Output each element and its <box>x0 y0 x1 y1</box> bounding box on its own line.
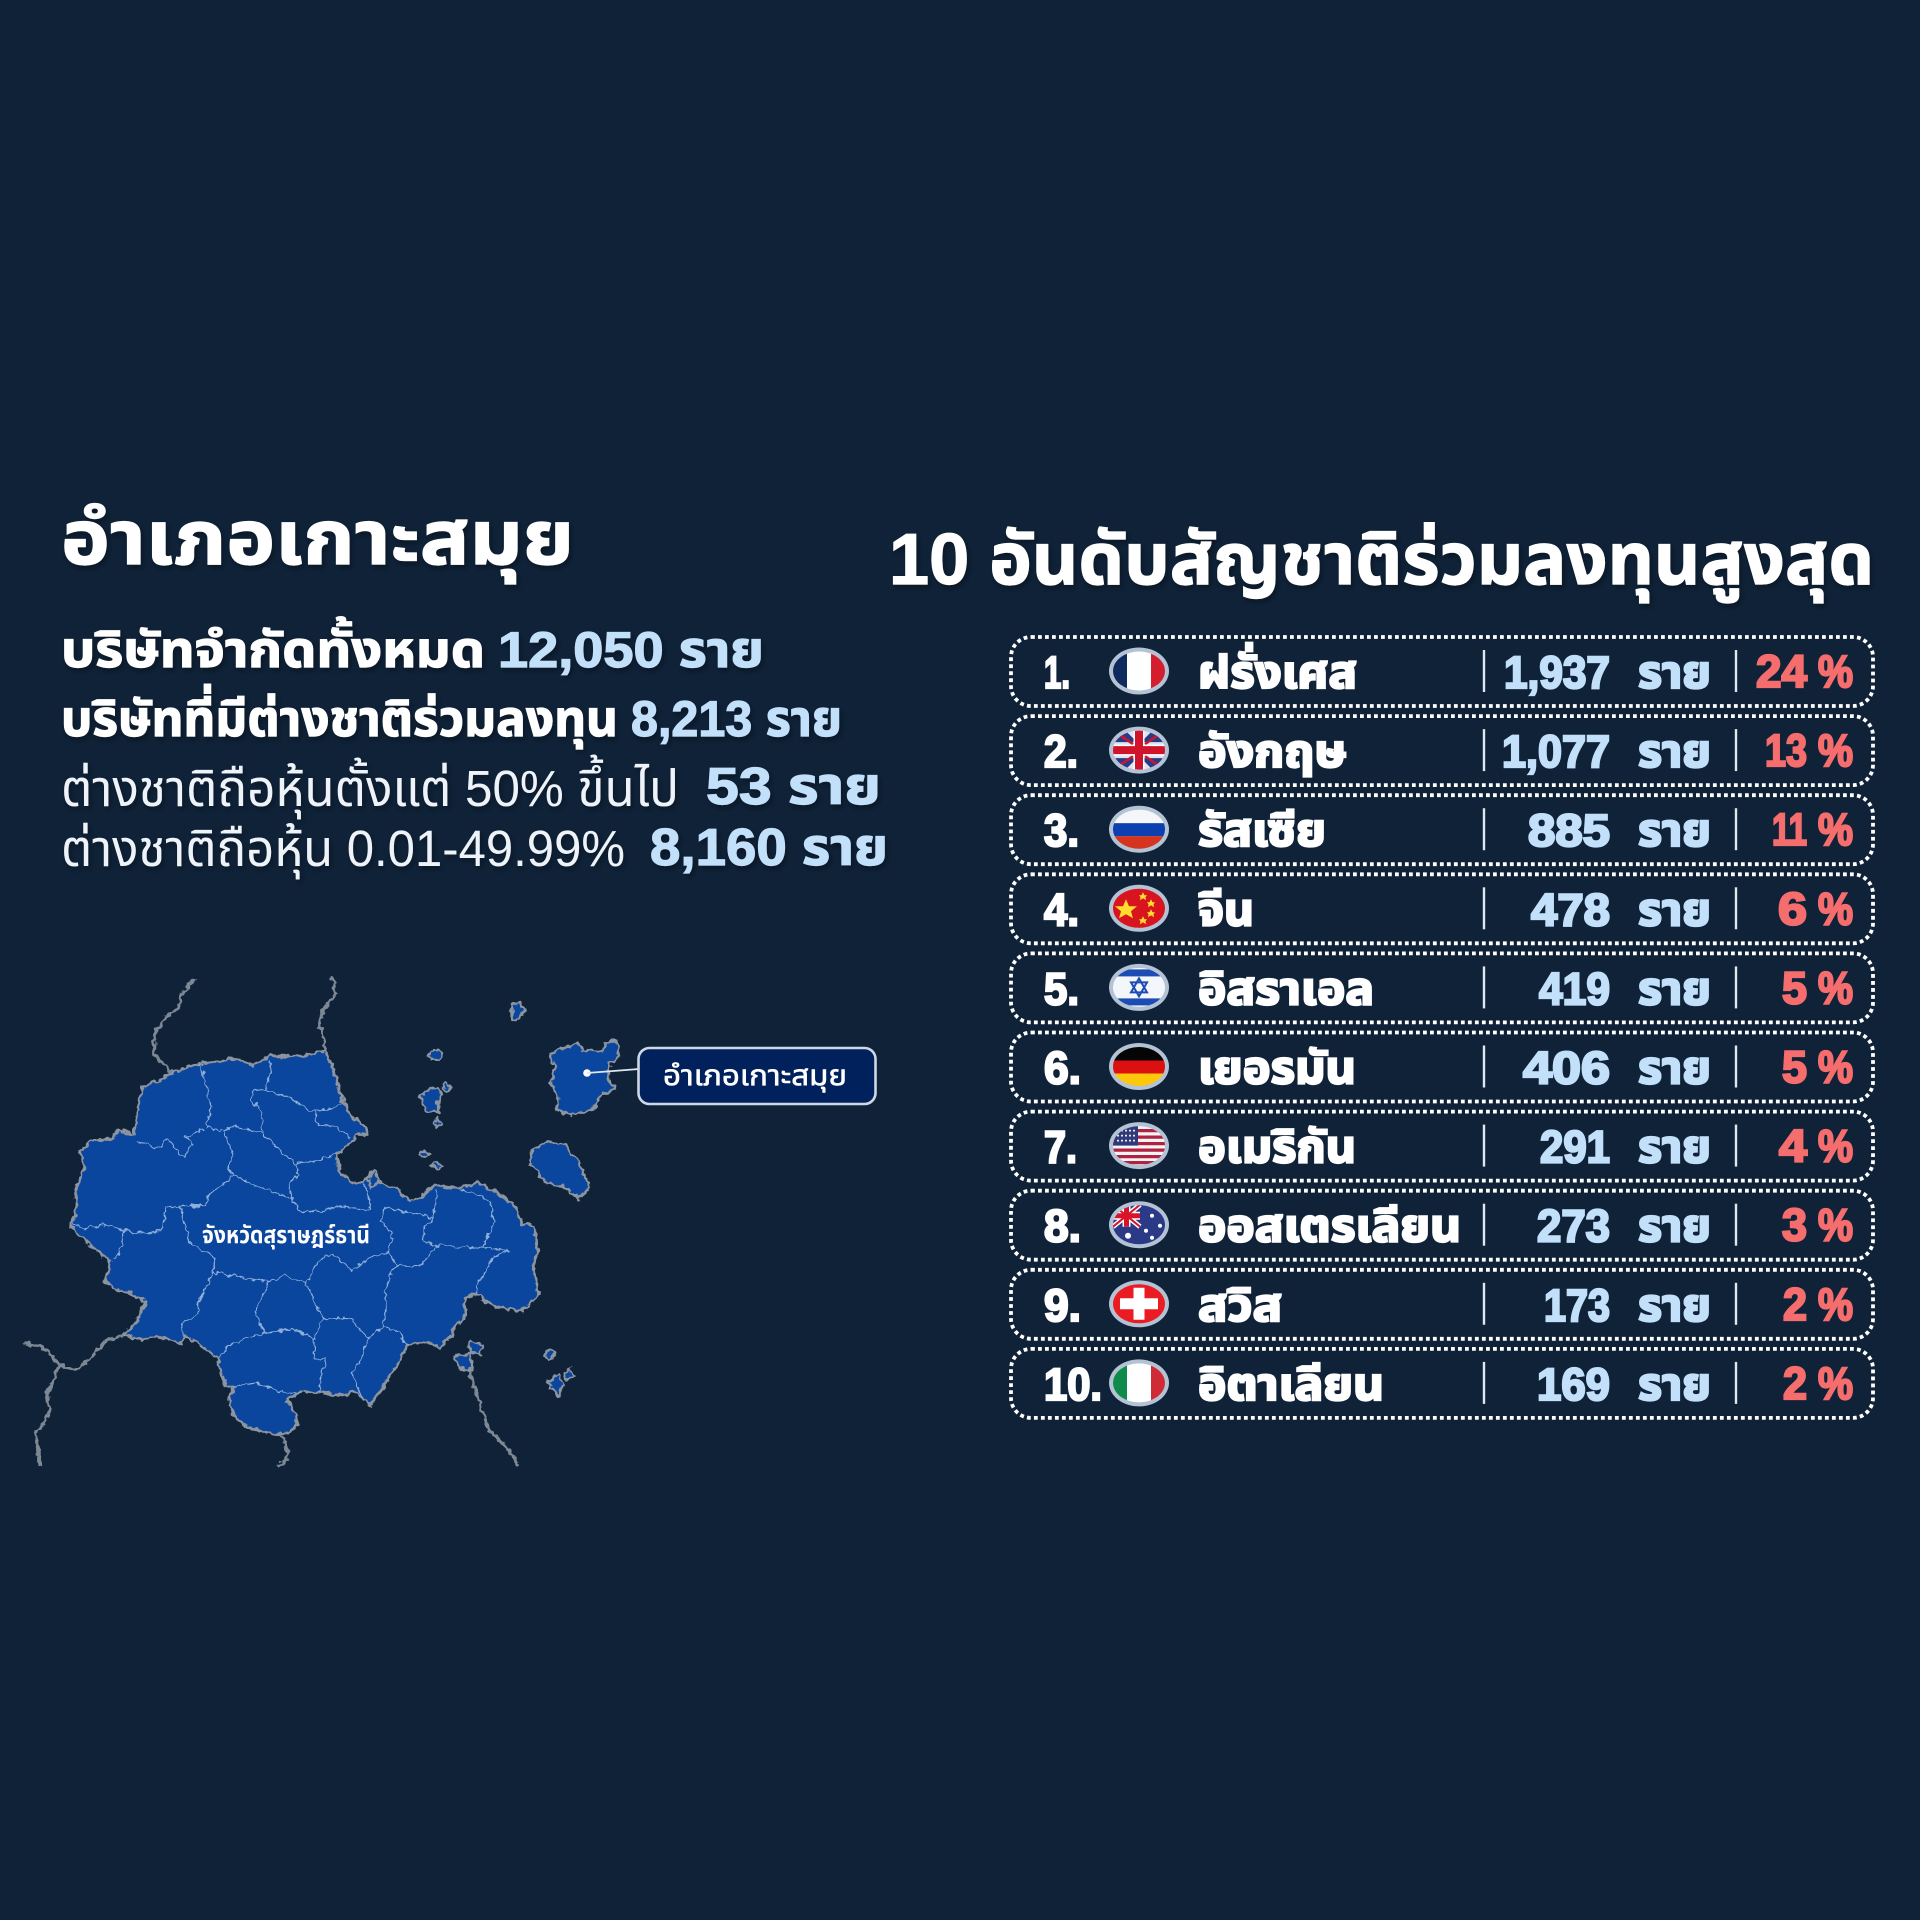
row 5: Israel: % <box>1818 962 1853 1013</box>
row 3: Russia: 11 <box>1772 804 1807 855</box>
row 3: Russia: % <box>1818 804 1853 855</box>
row 5: Israel: 5 <box>1782 962 1807 1013</box>
row 1: France: ฝรั่งเศส <box>1198 643 1357 698</box>
companies with foreign investors line: บริษัทที่มีต่างชาติร่วมลงทุน <box>61 684 618 749</box>
row 7: USA: % <box>1818 1121 1853 1172</box>
row 4: China <box>1011 874 1873 943</box>
row 5: Israel: 5. <box>1044 963 1079 1014</box>
row 2: England: 13 <box>1765 725 1807 776</box>
callout leader line and dot <box>583 1069 639 1077</box>
row 4: China: จีน <box>1198 884 1254 935</box>
icon: Italy flag <box>1109 1359 1169 1406</box>
row 3: Russia: ราย <box>1638 805 1711 856</box>
row 10: Italy: 169 <box>1537 1359 1610 1410</box>
callout: Koh Samui district: อำเภอเกาะสมุย <box>663 1060 847 1092</box>
icon: Australia flag <box>1109 1201 1169 1248</box>
row 6: Germany: ราย <box>1638 1042 1711 1094</box>
row 10: Italy: อิตาเลียน <box>1198 1359 1384 1410</box>
callout: Koh Samui district <box>638 1048 876 1104</box>
row 6: Germany: % <box>1818 1042 1853 1092</box>
foreign holding 50 percent or more line: ต่างชาติถือหุ้นตั้งแต่ 50% ขึ้นไป <box>61 754 679 820</box>
row 8: Australia: 273 <box>1537 1201 1610 1252</box>
icon: China flag <box>1109 885 1169 932</box>
foreign holding under 50 percent line: ต่างชาติถือหุ้น 0.01-49.99% <box>61 820 625 880</box>
row 2: England: ราย <box>1638 726 1711 777</box>
row 9: Switzerland: ราย <box>1638 1280 1711 1331</box>
icon: USA flag <box>1109 1122 1169 1169</box>
row 9: Switzerland: 2 <box>1783 1279 1807 1330</box>
foreign holding 50 percent or more line: 53 ราย <box>706 758 881 816</box>
icon: Switzerland flag <box>1109 1280 1169 1327</box>
icon: Russia flag <box>1109 806 1169 853</box>
row 5: Israel: ราย <box>1638 963 1711 1014</box>
row 4: China: 4. <box>1044 884 1079 935</box>
row 1: France: 1,937 <box>1504 647 1610 698</box>
row 6: Germany: 6. <box>1044 1042 1081 1094</box>
row 3: Russia: 885 <box>1528 805 1610 856</box>
row 1: France: 24 <box>1756 646 1807 697</box>
icon: Germany flag <box>1109 1043 1169 1090</box>
row 4: China: ราย <box>1638 884 1711 935</box>
row 4: China: 6 <box>1778 883 1807 934</box>
row 8: Australia: % <box>1818 1200 1853 1251</box>
companies with foreign investors line: 8,213 ราย <box>631 691 842 747</box>
row 4: China: 478 <box>1531 884 1610 935</box>
row 6: Germany <box>1011 1032 1873 1102</box>
ranking table <box>1011 637 1873 1418</box>
row 7: USA: อเมริกัน <box>1198 1122 1356 1173</box>
icon: Israel flag <box>1109 964 1169 1011</box>
row 2: England <box>1011 716 1873 785</box>
row 9: Switzerland: 9. <box>1044 1280 1081 1331</box>
row 7: USA: 4 <box>1779 1121 1807 1172</box>
row 9: Switzerland: % <box>1818 1279 1853 1330</box>
row 10: Italy: ราย <box>1638 1359 1711 1410</box>
foreign holding 50 percent or more line <box>61 754 881 820</box>
row 6: Germany: 406 <box>1523 1042 1610 1094</box>
companies with foreign investors line <box>61 684 842 749</box>
row 1: France: % <box>1818 646 1853 697</box>
row 8: Australia: ออสเตรเลียน <box>1198 1201 1461 1252</box>
row 10: Italy <box>1011 1349 1873 1418</box>
row 3: Russia: 3. <box>1044 805 1079 856</box>
row 10: Italy: 2 <box>1783 1358 1807 1409</box>
total companies line: บริษัทจำกัดทั้งหมด <box>61 617 485 678</box>
left title: อำเภอเกาะสมุย <box>61 496 574 584</box>
province label: จังหวัดสุราษฎร์ธานี <box>202 1222 370 1250</box>
right title: 10 อันดับสัญชาติร่วมลงทุนสูงสุด <box>889 520 1874 603</box>
row 8: Australia: 3 <box>1782 1200 1807 1251</box>
map of Surat Thani province <box>26 977 876 1465</box>
row 5: Israel: 419 <box>1539 963 1610 1014</box>
summary statistics <box>61 617 888 880</box>
row 9: Switzerland: 173 <box>1544 1280 1610 1331</box>
row 8: Australia <box>1011 1191 1873 1260</box>
icon: UK flag <box>1109 727 1169 774</box>
row 4: China: % <box>1818 883 1853 934</box>
row 9: Switzerland: สวิส <box>1198 1280 1282 1331</box>
icon: Koh Samui island <box>549 1042 620 1115</box>
row 7: USA: ราย <box>1638 1122 1711 1173</box>
row 2: England: อังกฤษ <box>1198 726 1347 777</box>
foreign holding under 50 percent line <box>61 819 888 880</box>
row 8: Australia: 8. <box>1044 1201 1081 1252</box>
total companies line <box>61 617 764 678</box>
icon: France flag <box>1109 648 1169 694</box>
map shapes <box>26 977 620 1465</box>
row 2: England: 2. <box>1044 726 1078 777</box>
row 6: Germany: เยอรมัน <box>1198 1042 1356 1094</box>
row 9: Switzerland <box>1011 1270 1873 1339</box>
row 3: Russia <box>1011 795 1873 864</box>
row 2: England: % <box>1818 725 1853 776</box>
row 1: France: ราย <box>1638 647 1711 698</box>
row 7: USA: 291 <box>1540 1122 1610 1173</box>
row 7: USA: 7. <box>1044 1122 1077 1173</box>
foreign holding under 50 percent line: 8,160 ราย <box>650 819 888 877</box>
row 8: Australia: ราย <box>1638 1201 1711 1252</box>
row 2: England: 1,077 <box>1502 726 1610 777</box>
row 5: Israel: อิสราเอล <box>1198 963 1374 1014</box>
row 1: France: 1. <box>1044 647 1070 698</box>
total companies line: 12,050 ราย <box>498 622 764 678</box>
row 7: USA <box>1011 1112 1873 1181</box>
row 10: Italy: 10. <box>1044 1359 1102 1410</box>
row 6: Germany: 5 <box>1782 1042 1807 1092</box>
row 5: Israel <box>1011 953 1873 1022</box>
row 1: France <box>1011 637 1873 706</box>
row 10: Italy: % <box>1818 1358 1853 1409</box>
row 3: Russia: รัสเซีย <box>1198 805 1326 856</box>
